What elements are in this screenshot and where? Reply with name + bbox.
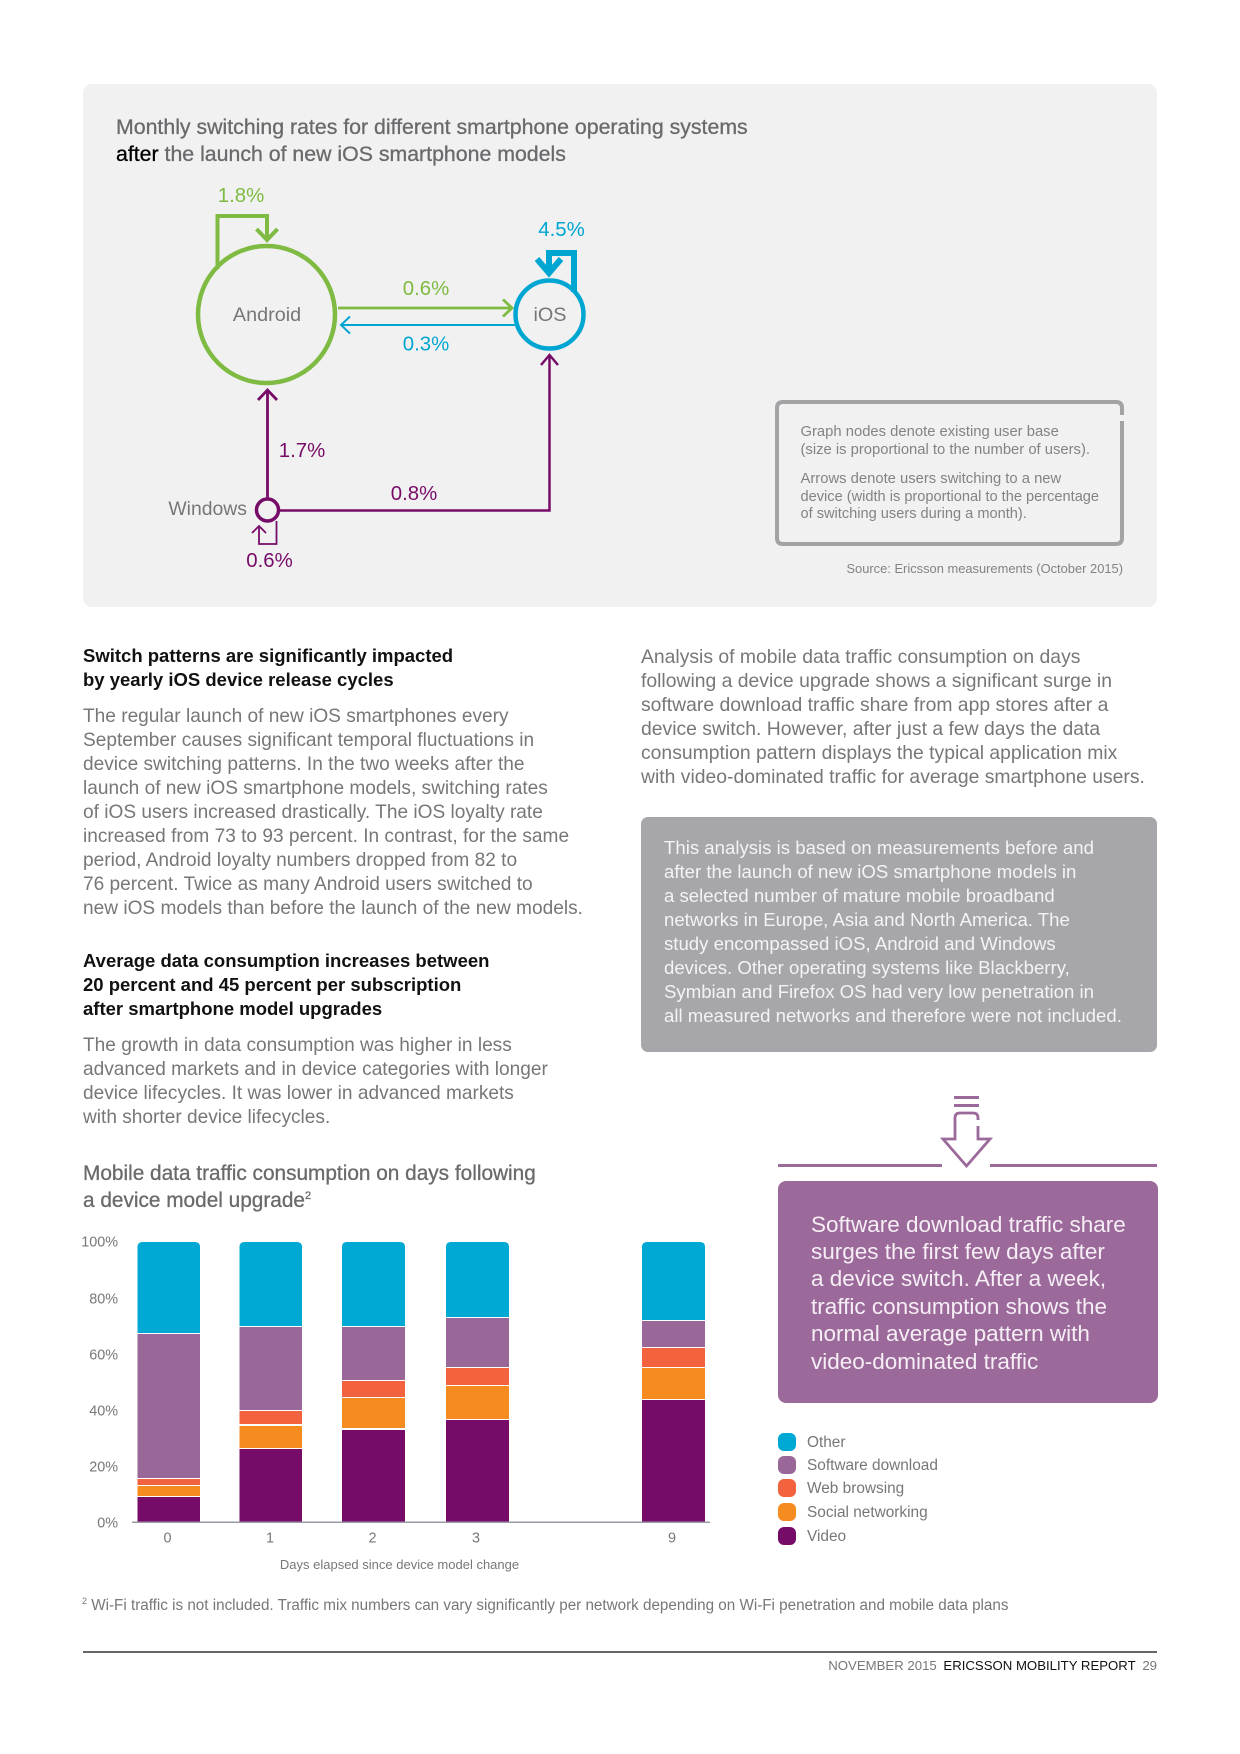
Windows self-loop arrow	[246, 521, 293, 572]
y axis labels: 0%	[97, 1516, 118, 1532]
x axis labels: 9	[668, 1530, 676, 1546]
callout text: all measured networks and therefore were not included.	[664, 1005, 1122, 1026]
callout text: This analysis is based on measurements before and	[664, 837, 1094, 858]
body text: switch patterns: The regular launch of new iOS smartphones every	[83, 706, 509, 727]
body text: right column: Analysis of mobile data traffic consumption on days	[641, 646, 1080, 668]
Android to iOS arrow	[338, 278, 512, 316]
Windows to Android arrow: 1.7%	[279, 440, 325, 462]
y axis labels: 80%	[89, 1292, 118, 1308]
purple callout text: surges the first few days after	[811, 1239, 1105, 1264]
body text: data consumption: advanced markets and in device categories with longer	[83, 1059, 548, 1080]
Windows node	[168, 498, 278, 521]
Windows node: Windows	[168, 498, 247, 520]
legend item: web browsing: Web browsing	[807, 1480, 904, 1497]
body text: right column: software download traffic share from app stores after a	[641, 694, 1108, 716]
y axis labels	[81, 1234, 118, 1532]
legend note box	[777, 402, 1122, 544]
Windows to iOS arrow	[279, 355, 558, 510]
heading: switch patterns: Switch patterns are significantly impacted	[83, 645, 453, 666]
bar day 1	[240, 1242, 302, 1522]
heading: average data consumption: 20 percent and 45 percent per subscription	[83, 974, 461, 995]
callout text: study encompassed iOS, Android and Windows	[664, 933, 1056, 954]
source note: Source: Ericsson measurements (October 2015)	[846, 561, 1123, 576]
panel heading: Monthly switching rates for different smartphone operating systems	[116, 115, 748, 139]
heading: switch patterns	[83, 645, 453, 690]
iOS to Android arrow	[341, 316, 515, 356]
heading: average data consumption: Average data consumption increases between	[83, 950, 489, 971]
body text: switch patterns: 76 percent. Twice as many Android users switched to	[83, 874, 533, 895]
chart title: Mobile data traffic consumption on days following	[83, 1162, 536, 1184]
Windows to iOS arrow: 0.8%	[391, 483, 437, 505]
Windows self-loop arrow: 0.6%	[246, 550, 293, 572]
body text: switch patterns: of iOS users increased drastically. The iOS loyalty rate	[83, 802, 543, 823]
x axis labels: 2	[368, 1530, 377, 1546]
purple callout text: normal average pattern with	[811, 1321, 1090, 1346]
body text: right column: following a device upgrade shows a significant surge in	[641, 670, 1112, 692]
footnote: 2 Wi-Fi traffic is not included. Traffic mix numbers can vary significantly per network depending on Wi-Fi penetration and mobile data plans	[82, 1595, 1008, 1614]
callout text: Symbian and Firefox OS had very low penetration in	[664, 981, 1094, 1002]
heading: switch patterns: by yearly iOS device release cycles	[83, 669, 394, 690]
purple callout text	[811, 1212, 1126, 1374]
purple callout text: Software download traffic share	[811, 1212, 1126, 1236]
x axis labels: 0	[163, 1530, 172, 1546]
legend item: video: Video	[807, 1528, 846, 1545]
body text: switch patterns: September causes significant temporal fluctuations in	[83, 730, 534, 751]
legend note box: Arrows denote users switching to a new	[800, 471, 1062, 487]
y axis labels: 20%	[89, 1460, 118, 1476]
body text: right column: device switch. However, after just a few days the data	[641, 718, 1100, 740]
iOS node	[516, 280, 584, 348]
body text: data consumption	[83, 1035, 548, 1128]
body text: right column: with video-dominated traffic for average smartphone users.	[641, 766, 1145, 788]
iOS to Android arrow: 0.3%	[403, 334, 449, 356]
body text: switch patterns: increased from 73 to 93 percent. In contrast, for the same	[83, 826, 569, 847]
callout text: after the launch of new iOS smartphone models in	[664, 861, 1076, 882]
y axis labels: 100%	[81, 1234, 118, 1250]
x axis labels: 1	[266, 1530, 274, 1546]
legend note box: Graph nodes denote existing user base	[800, 424, 1059, 440]
purple callout text: traffic consumption shows the	[811, 1294, 1107, 1319]
panel heading	[116, 115, 748, 166]
bar day 0	[138, 1242, 200, 1522]
bar day 3	[446, 1242, 509, 1522]
panel: switching rates	[83, 84, 1157, 607]
chart title: a device model upgrade2	[83, 1188, 311, 1212]
body text: right column	[641, 646, 1145, 788]
legend note box: (size is proportional to the number of users).	[800, 442, 1090, 458]
Android node	[198, 246, 335, 383]
legend note box: of switching users during a month).	[800, 506, 1027, 522]
Windows to Android arrow	[258, 390, 325, 499]
legend item: other	[778, 1433, 846, 1451]
body text: right column: consumption pattern displays the typical application mix	[641, 742, 1117, 764]
purple callout	[778, 1181, 1158, 1403]
body text: data consumption: The growth in data consumption was higher in less	[83, 1035, 512, 1056]
bar day 9	[642, 1242, 705, 1522]
heading: average data consumption: after smartphone model upgrades	[83, 998, 382, 1019]
footer rule	[83, 1651, 1157, 1653]
Android self-loop arrow	[218, 185, 278, 269]
x axis line	[132, 1522, 710, 1523]
x axis labels	[163, 1530, 676, 1546]
body text: switch patterns: new iOS models than before the launch of the new models.	[83, 898, 583, 919]
body text: data consumption: with shorter device lifecycles.	[83, 1107, 330, 1128]
body text: data consumption: device lifecycles. It was lower in advanced markets	[83, 1083, 514, 1104]
body text: switch patterns: launch of new iOS smartphone models, switching rates	[83, 778, 548, 799]
x axis title: Days elapsed since device model change	[280, 1557, 519, 1572]
footer text: NOVEMBER 2015 ERICSSON MOBILITY REPORT 29	[828, 1658, 1157, 1673]
icon: download arrow with rule	[778, 1098, 1157, 1166]
body text: switch patterns	[83, 706, 583, 919]
chart title	[83, 1162, 536, 1212]
purple callout text: video-dominated traffic	[811, 1349, 1038, 1374]
heading: average data consumption	[83, 950, 489, 1019]
Android to iOS arrow: 0.6%	[403, 278, 449, 300]
legend item: other: Other	[807, 1434, 846, 1451]
iOS node: iOS	[534, 304, 566, 326]
iOS self-loop arrow	[537, 219, 585, 292]
legend	[778, 1433, 938, 1545]
y axis labels: 40%	[89, 1404, 118, 1420]
Android node: Android	[233, 304, 301, 326]
panel heading: after the launch of new iOS smartphone models	[116, 142, 566, 166]
y axis labels: 60%	[89, 1348, 118, 1364]
body text: switch patterns: period, Android loyalty numbers dropped from 82 to	[83, 850, 517, 871]
callout text	[664, 837, 1122, 1026]
callout text: a selected number of mature mobile broadband	[664, 885, 1055, 906]
purple callout text: a device switch. After a week,	[811, 1266, 1106, 1291]
legend note box: device (width is proportional to the percentage	[800, 489, 1099, 505]
legend item: social networking: Social networking	[807, 1504, 928, 1521]
body text: switch patterns: device switching patterns. In the two weeks after the	[83, 754, 525, 775]
bar day 2	[342, 1242, 405, 1522]
legend item: software download: Software download	[807, 1457, 938, 1474]
Android self-loop arrow: 1.8%	[218, 185, 264, 207]
callout text: devices. Other operating systems like Blackberry,	[664, 957, 1070, 978]
x axis labels: 3	[472, 1530, 480, 1546]
iOS self-loop arrow: 4.5%	[538, 219, 585, 241]
legend item: video	[778, 1527, 846, 1545]
grey callout	[641, 817, 1157, 1052]
switching diagram	[168, 185, 1124, 576]
callout text: networks in Europe, Asia and North America. The	[664, 909, 1070, 930]
